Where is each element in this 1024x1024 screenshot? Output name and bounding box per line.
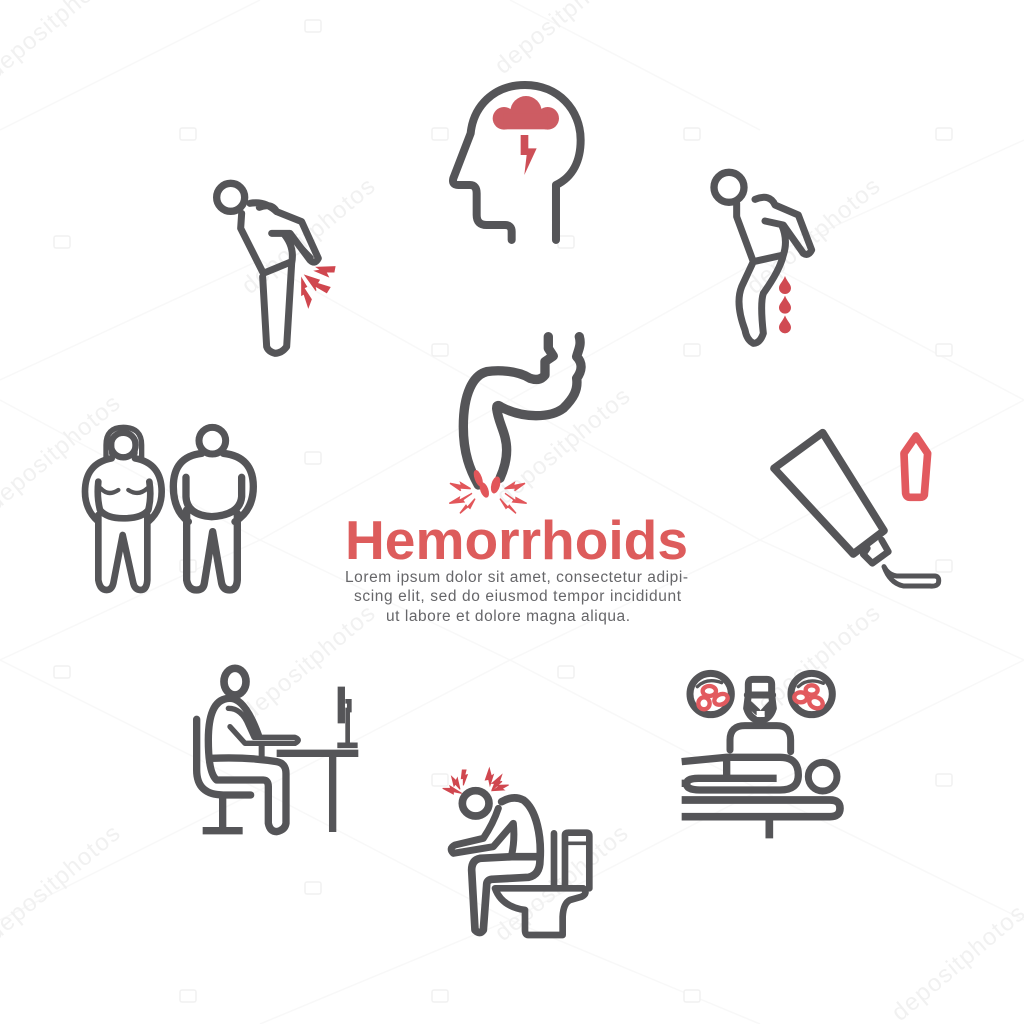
icon: bleeding figure: [714, 172, 812, 343]
infographic: depositphotos: [492, 383, 635, 510]
icon: person on toilet: [443, 768, 589, 935]
infographic: depositphotos: [742, 173, 885, 300]
infographic: depositphotos: [742, 600, 885, 727]
description text: [345, 569, 688, 625]
description text: scing elit, sed do eiusmod tempor incididunt: [354, 588, 682, 605]
icon: person at desk: [197, 668, 358, 832]
infographic: depositphotos: [237, 173, 380, 300]
description text: Lorem ipsum dolor sit amet, consectetur adipi-: [345, 569, 688, 586]
icon: head with storm cloud: [453, 85, 581, 240]
infographic: depositphotos: [490, 820, 633, 947]
icon: overweight couple: [85, 427, 253, 590]
icon: colon with inflamed hemorrhoids: [449, 337, 581, 513]
description text: ut labore et dolore magna aliqua.: [386, 608, 630, 625]
infographic: depositphotos: [237, 600, 380, 727]
title: Hemorrhoids: [345, 509, 688, 571]
icon: ointment tube and suppository: [774, 433, 939, 586]
icon: back pain figure: [217, 183, 335, 353]
icon: surgeon with operating lamps and patient: [682, 673, 840, 838]
